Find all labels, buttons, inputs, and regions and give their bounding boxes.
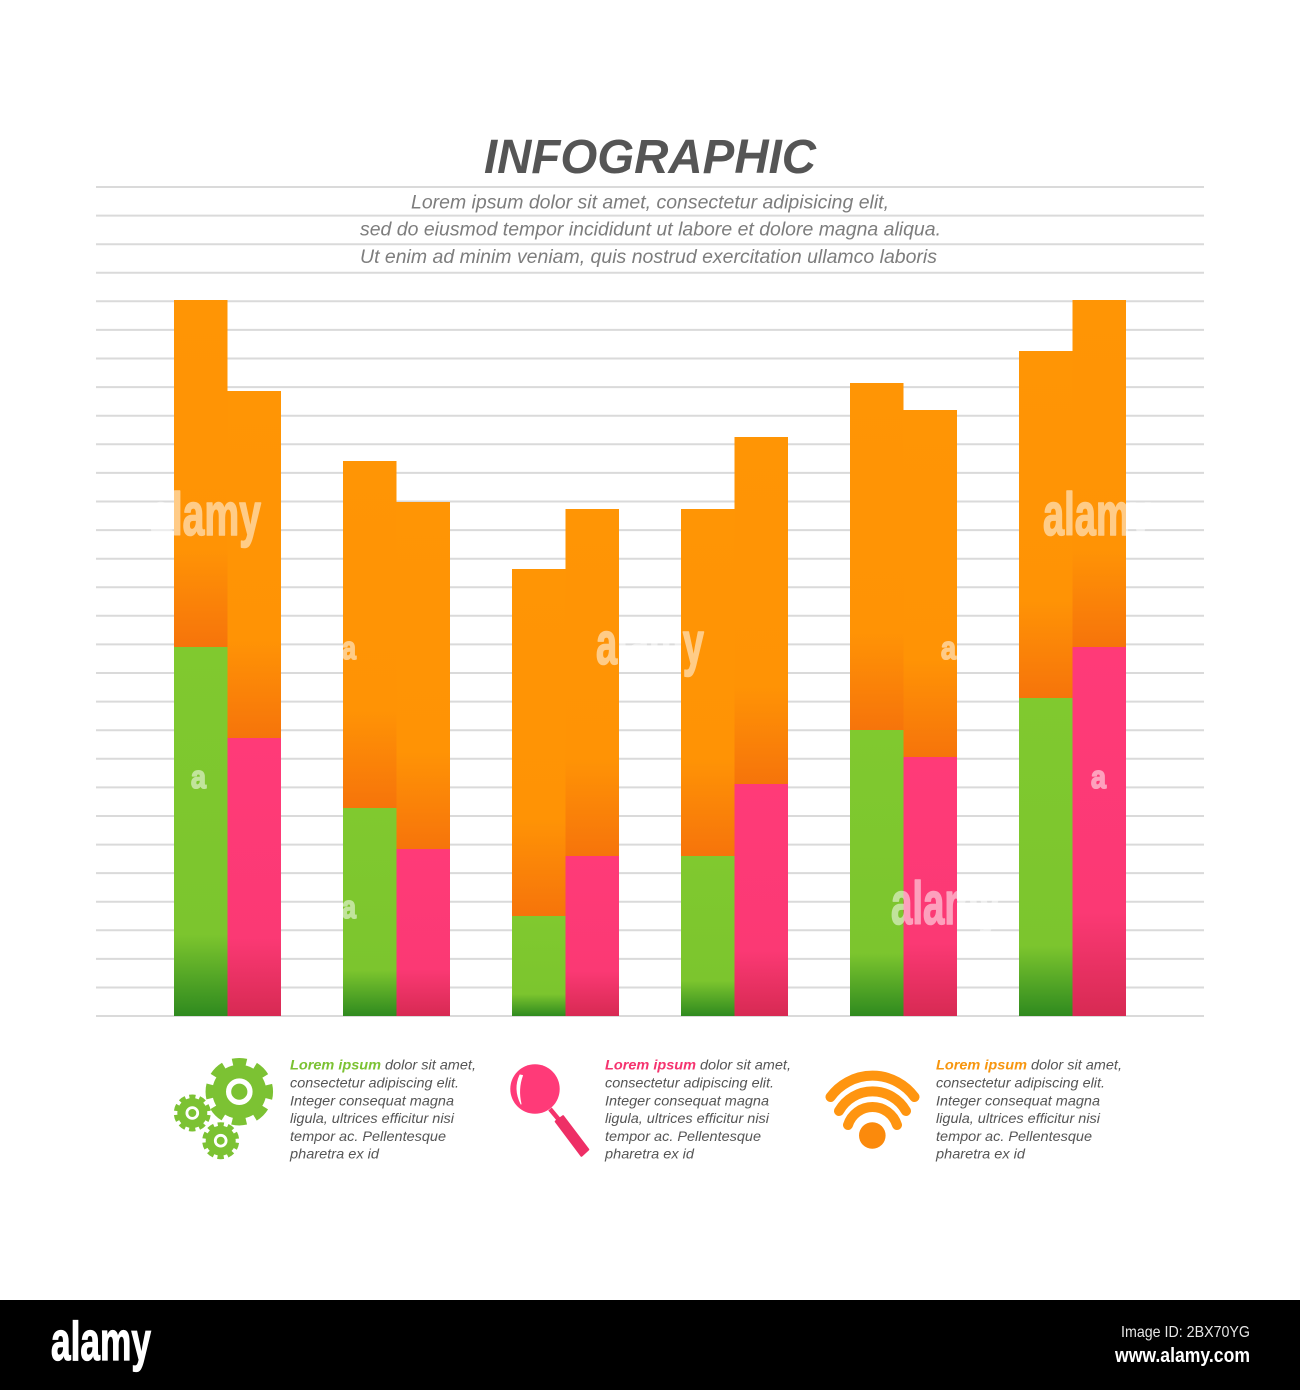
footer image id: Image ID: 2BX70YG [1121,1324,1250,1341]
subtitle text block: Ut enim ad minim veniam, quis nostrud exercitation ullamco laboris [360,247,938,268]
text block: magnifying glass: pharetra ex id [604,1146,695,1162]
text block: gears: tempor ac. Pellentesque [290,1128,446,1144]
text block: gears: Lorem ipsum [290,1056,381,1072]
bar group 5 [850,383,957,1016]
watermarks over chart: alamy [596,610,704,677]
text block: magnifying glass: ligula, ultrices efficitur nisi [605,1110,770,1126]
text block: gears [289,1056,476,1162]
footer band [0,1300,1300,1390]
subtitle text block [360,192,941,268]
icon: wifi [830,1076,914,1149]
text block: wifi: pharetra ex id [935,1146,1026,1162]
text block: wifi: tempor ac. Pellentesque [936,1128,1092,1144]
bar group 1 [174,300,281,1016]
watermarks over chart: a [191,759,206,795]
text block: wifi: dolor sit amet, [1031,1056,1122,1072]
watermarks over chart: a [941,630,956,666]
bar group 6 [1019,300,1126,1016]
watermarks over chart: a [1091,759,1106,795]
bar group 2 [343,461,450,1016]
text block: gears: pharetra ex id [289,1146,380,1162]
text block: magnifying glass: Integer consequat magna [605,1092,769,1108]
text block: magnifying glass [604,1056,791,1162]
watermarks over chart: alamy [891,870,1000,937]
text block: magnifying glass: Lorem ipsum [605,1056,696,1072]
text block: wifi [935,1056,1122,1162]
watermarks over chart: alamy [150,481,261,548]
text block: magnifying glass: consectetur adipiscing elit. [605,1074,774,1090]
text block: wifi: ligula, ultrices efficitur nisi [936,1110,1101,1126]
text block: gears: Integer consequat magna [290,1092,454,1108]
bar group 4 [681,437,788,1016]
title: INFOGRAPHIC [484,131,817,184]
footer logo: alamy [51,1310,151,1372]
subtitle text block: Lorem ipsum dolor sit amet, consectetur adipisicing elit, [411,192,889,214]
watermarks over chart: a [342,630,356,666]
text block: magnifying glass: tempor ac. Pellentesque [605,1128,761,1144]
bar group 3 [512,509,619,1016]
subtitle text block: sed do eiusmod tempor incididunt ut labore et dolore magna aliqua. [360,220,941,240]
text block: wifi: consectetur adipiscing elit. [936,1074,1105,1090]
text block: gears: dolor sit amet, [385,1056,476,1072]
text block: gears: ligula, ultrices efficitur nisi [290,1110,455,1126]
text block: wifi: Integer consequat magna [936,1092,1100,1108]
text block: gears: consectetur adipiscing elit. [290,1074,459,1090]
icon: magnifying glass [510,1064,588,1156]
bar chart [174,300,1126,1016]
text block: wifi: Lorem ipsum [936,1056,1027,1072]
watermarks over chart [150,481,1151,937]
footer url: www.alamy.com [1114,1345,1250,1367]
text block: magnifying glass: dolor sit amet, [700,1056,791,1072]
watermarks over chart: a [342,889,356,925]
watermarks over chart: alamy [1043,481,1151,548]
icon: gears [176,1062,269,1157]
